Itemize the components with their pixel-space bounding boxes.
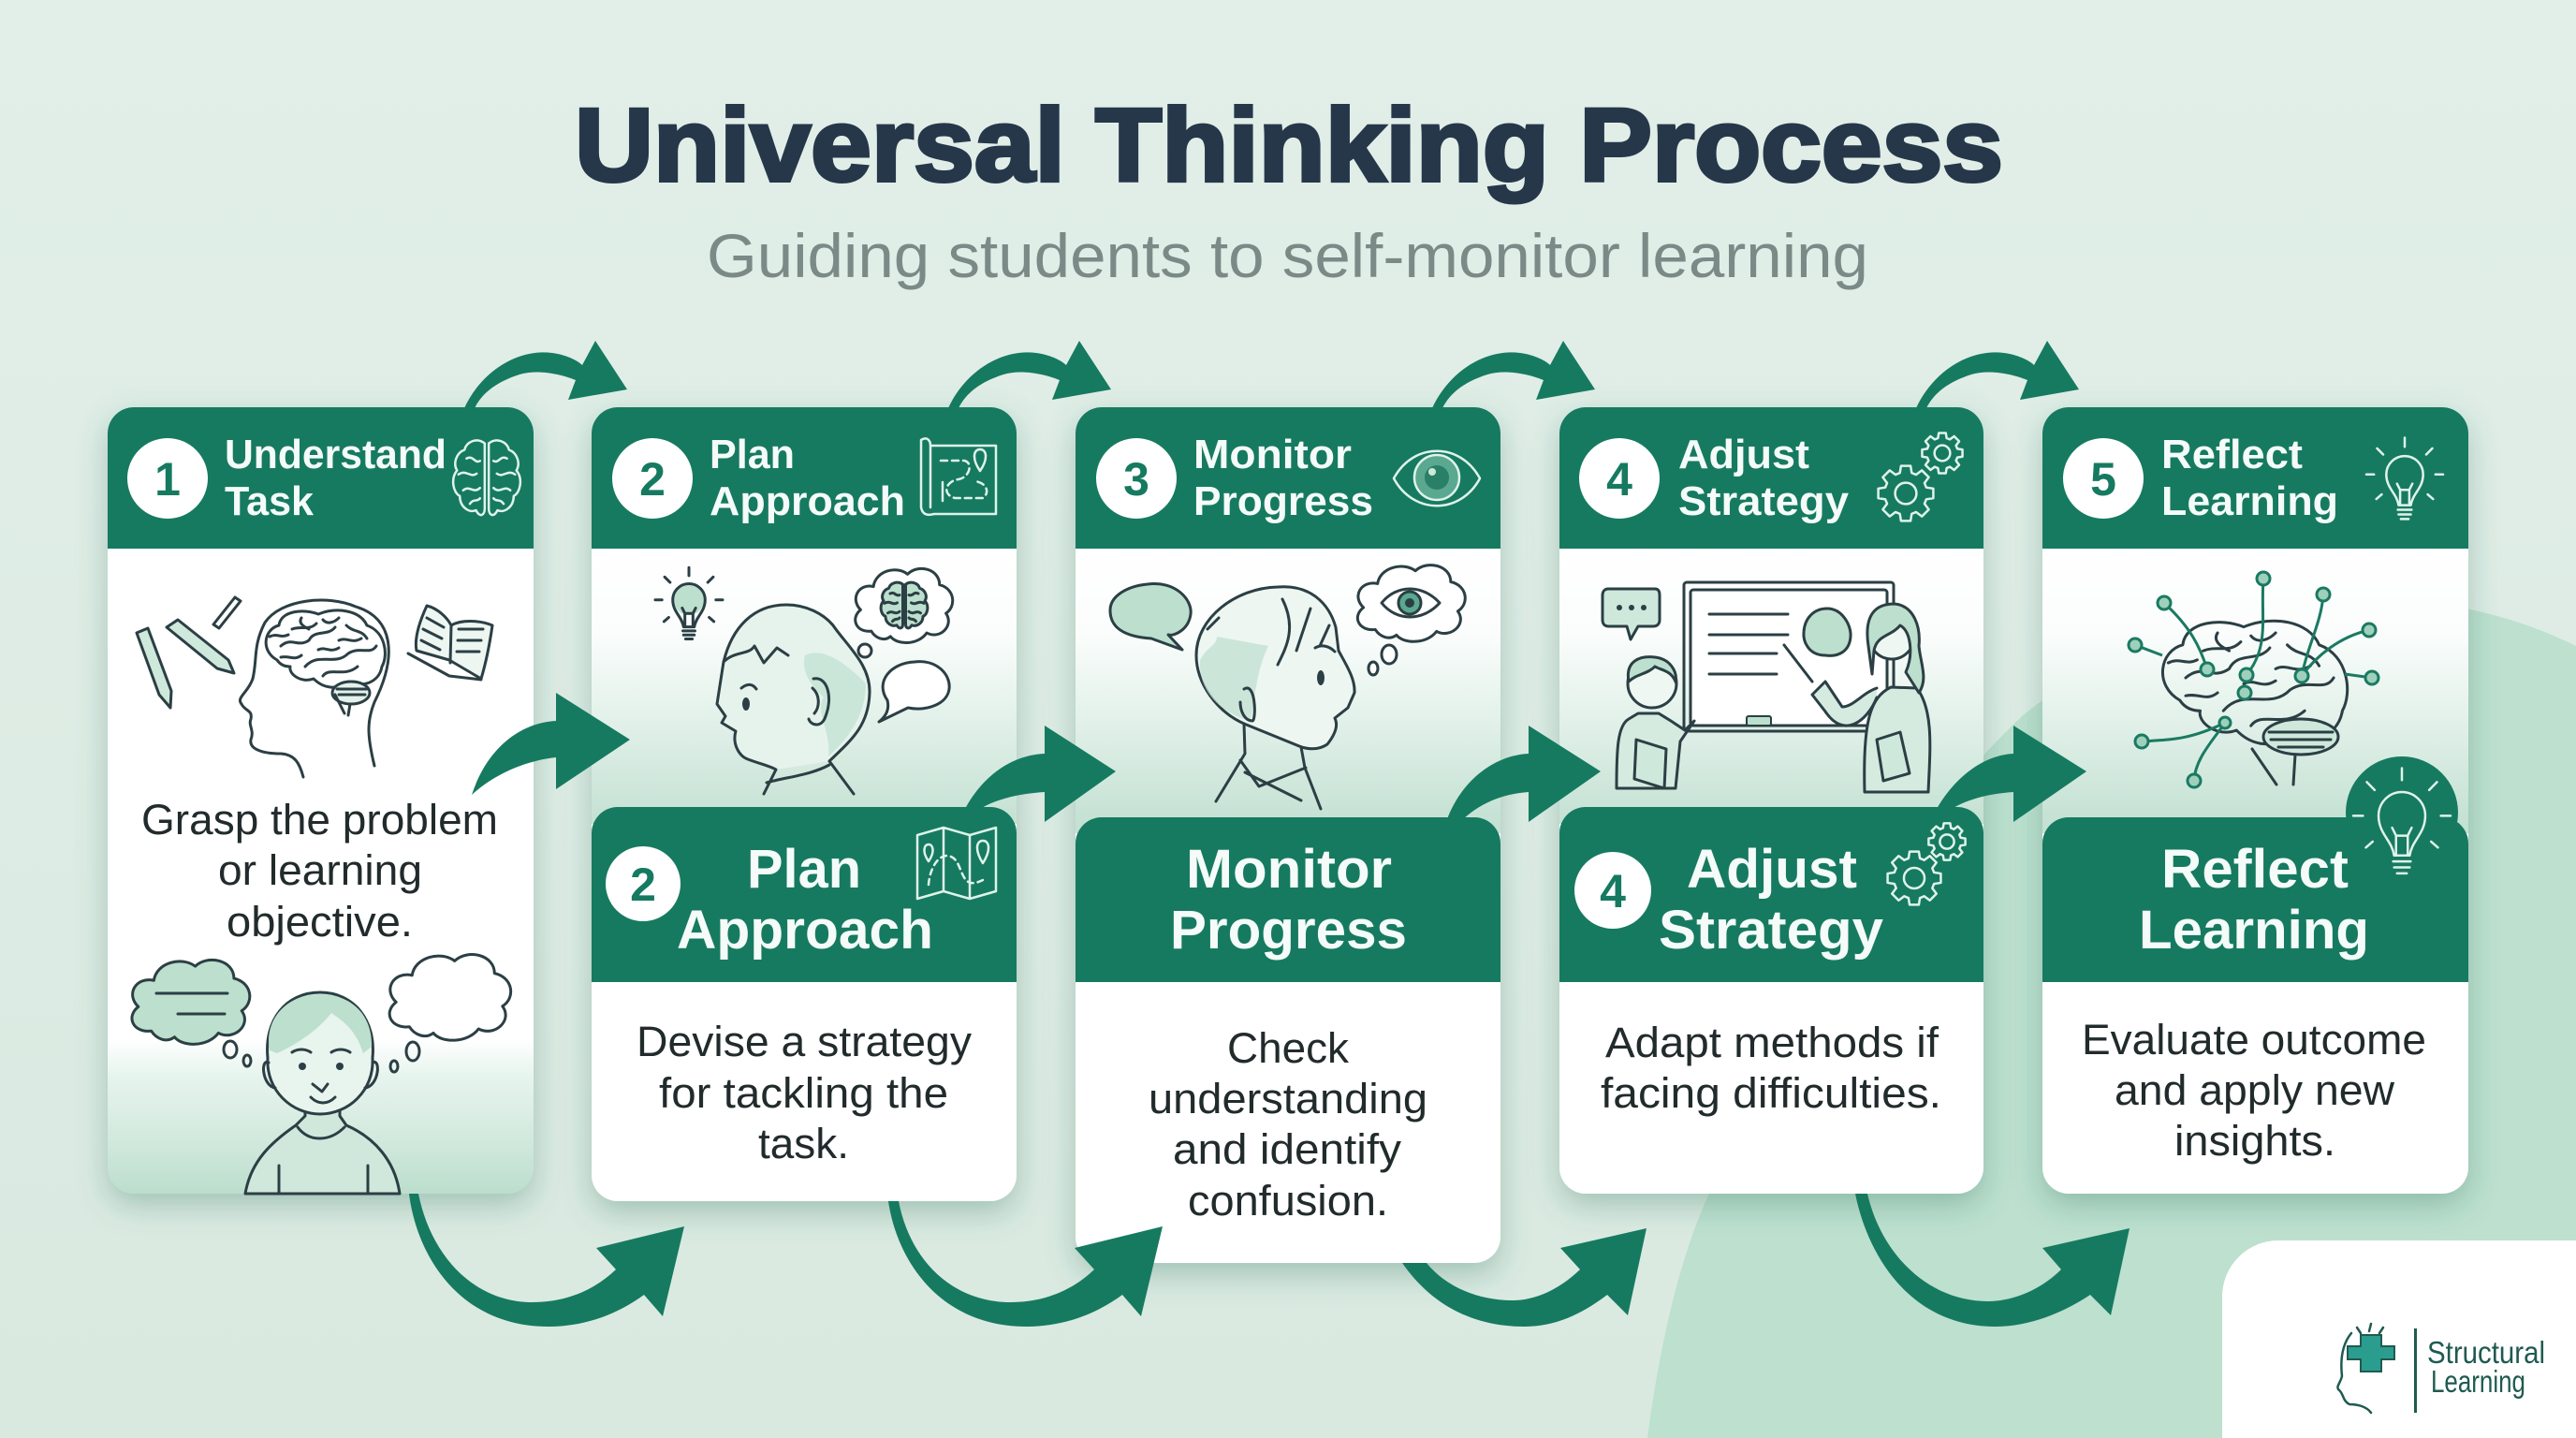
body text: facing difficulties. — [1601, 1069, 1941, 1117]
arrow: top 1 to 2 — [464, 341, 627, 408]
illustration: teacher and student at board — [1603, 582, 1930, 792]
heading: understand task: Understand — [225, 432, 446, 477]
icon: gears lower — [1888, 823, 1966, 904]
heading: monitor progress: Progress — [1193, 478, 1373, 524]
number badge 4 lower: 4 — [1600, 865, 1626, 917]
arrow: bottom 3 to 4 — [1402, 1228, 1647, 1327]
icon: gears — [1879, 433, 1963, 521]
body text: insights. — [2174, 1117, 2335, 1165]
body text: for tackling the — [659, 1069, 948, 1117]
heading: plan approach lower: Plan — [747, 839, 861, 900]
arrows between cards — [472, 693, 2086, 822]
number badge 4: 4 — [1606, 453, 1632, 506]
heading: plan approach: Approach — [710, 478, 905, 524]
header band — [108, 407, 534, 549]
card body — [1559, 407, 1983, 1194]
heading: reflect learning lower: Learning — [2139, 900, 2369, 961]
arrow: top 4 to 5 — [1916, 341, 2079, 408]
logo card — [2222, 1240, 2576, 1438]
body text — [1149, 1024, 1427, 1225]
body text — [2082, 1016, 2426, 1165]
heading: adjust strategy lower — [1659, 839, 1883, 961]
arrow: top 3 to 4 — [1432, 341, 1595, 408]
card body — [592, 407, 1017, 1201]
panel: step 5 reflect learning — [2042, 407, 2468, 1194]
divider — [2414, 1328, 2417, 1413]
icon: eye — [1394, 451, 1480, 506]
body text: or learning — [218, 846, 422, 894]
illustration: child monitoring — [1110, 565, 1465, 809]
header band — [2042, 407, 2468, 549]
heading: monitor progress: Monitor — [1193, 432, 1352, 477]
panel: step 3 monitor progress — [1076, 407, 1500, 1263]
card body — [1076, 407, 1500, 1263]
heading: reflect learning: Learning — [2161, 478, 2338, 524]
heading: reflect learning lower — [2139, 839, 2369, 961]
number badge 4 lower — [1574, 852, 1651, 929]
heading: monitor progress lower: Monitor — [1186, 839, 1392, 900]
number badge 4 — [1579, 438, 1660, 519]
body text — [637, 1018, 973, 1167]
arrows below cards — [409, 1194, 2130, 1327]
number badge 3 — [1096, 438, 1177, 519]
number badge 2 lower: 2 — [630, 858, 656, 911]
icon: head with cross — [2337, 1324, 2394, 1413]
number badge 5: 5 — [2090, 453, 2116, 506]
icon: bulb foreground — [2353, 769, 2451, 873]
arrow: middle 1 to 2 — [472, 693, 630, 795]
body text: Adapt methods if — [1605, 1019, 1939, 1066]
body text: confusion. — [1188, 1177, 1388, 1225]
number badge 1: 1 — [154, 453, 181, 506]
heading: plan approach lower — [677, 839, 933, 961]
lower header band: monitor progress — [1076, 817, 1500, 982]
illustration background — [1076, 549, 1500, 833]
body text: understanding — [1149, 1075, 1427, 1123]
illustration: brain with network nodes — [2129, 572, 2378, 787]
lower header band: plan approach — [592, 807, 1017, 982]
arrow: middle 4 to 5 — [1936, 726, 2086, 822]
number badge 1 — [127, 438, 208, 519]
badge: light bulb dome — [2346, 756, 2458, 869]
heading: adjust strategy: Strategy — [1678, 478, 1850, 524]
illustration: child thinking with bulb and brain — [655, 567, 953, 794]
arrow: middle 2 to 3 — [964, 726, 1116, 822]
heading: adjust strategy: Adjust — [1678, 432, 1809, 477]
logo text: Structural — [2427, 1335, 2545, 1370]
header band — [1559, 407, 1983, 549]
subtitle: Guiding students to self-monitor learning — [707, 221, 1868, 290]
arrow: bottom 1 to 2 — [409, 1194, 684, 1327]
lower header band: reflect learning — [2042, 769, 2468, 982]
lower header band: adjust strategy — [1559, 807, 1983, 982]
arrow: middle 3 to 4 — [1446, 726, 1601, 822]
icon: folded map — [917, 828, 996, 899]
illustration: head with brain, pencils, book — [137, 597, 492, 777]
heading: adjust strategy — [1678, 432, 1850, 524]
number badge 2 lower — [606, 846, 681, 921]
icon: light bulb — [2366, 437, 2443, 519]
heading: reflect learning lower: Reflect — [2161, 839, 2349, 900]
arrow: bottom 4 to 5 — [1855, 1194, 2130, 1327]
illustration background — [592, 549, 1017, 824]
heading: plan approach lower: Approach — [677, 900, 933, 961]
card body — [108, 407, 534, 1194]
illustration: child with thought clouds — [132, 955, 511, 1194]
title: Universal Thinking Process — [575, 88, 2003, 203]
body text: Evaluate outcome — [2082, 1016, 2426, 1064]
body text: and apply new — [2115, 1066, 2395, 1114]
heading: adjust strategy lower: Adjust — [1687, 839, 1857, 900]
number badge 2 — [612, 438, 693, 519]
panel: logo — [2222, 1240, 2576, 1438]
body text: task. — [758, 1120, 849, 1167]
illustration background — [1559, 549, 1983, 824]
number badge 3: 3 — [1123, 453, 1149, 506]
heading: adjust strategy lower: Strategy — [1659, 900, 1883, 961]
heading: monitor progress — [1193, 432, 1373, 524]
body text: Devise a strategy — [637, 1018, 973, 1065]
number badge 5 — [2063, 438, 2144, 519]
number badge 2: 2 — [639, 453, 666, 506]
body text — [141, 796, 498, 946]
body text — [1601, 1019, 1941, 1117]
panel: step 2 plan approach — [592, 407, 1017, 1201]
panel: step 1 understand task — [108, 407, 534, 1194]
arrow: bottom 2 to 3 — [888, 1201, 1163, 1327]
heading: plan approach: Plan — [710, 432, 795, 477]
body text: Check — [1227, 1024, 1349, 1072]
heading: reflect learning — [2161, 432, 2338, 524]
heading: plan approach — [710, 432, 905, 524]
header band — [592, 407, 1017, 549]
heading: understand task — [225, 432, 446, 524]
body text: and identify — [1173, 1125, 1402, 1173]
icon: brain — [453, 440, 520, 515]
background blob — [1647, 598, 2576, 1438]
heading: monitor progress lower: Progress — [1170, 900, 1407, 961]
icon: map scroll — [921, 438, 996, 515]
logo text — [2427, 1335, 2545, 1399]
heading: reflect learning: Reflect — [2161, 432, 2303, 477]
arrows above cards — [464, 341, 2079, 408]
body text: objective. — [227, 898, 413, 946]
illustration background — [2042, 549, 2468, 833]
heading: monitor progress lower — [1170, 839, 1407, 961]
header band — [1076, 407, 1500, 549]
body text: Grasp the problem — [141, 796, 498, 844]
panel: step 4 adjust strategy — [1559, 407, 1983, 1194]
arrow: top 2 to 3 — [948, 341, 1111, 408]
heading: understand task: Task — [225, 478, 315, 524]
card body — [2042, 407, 2468, 1194]
logo text: Learning — [2431, 1364, 2525, 1399]
